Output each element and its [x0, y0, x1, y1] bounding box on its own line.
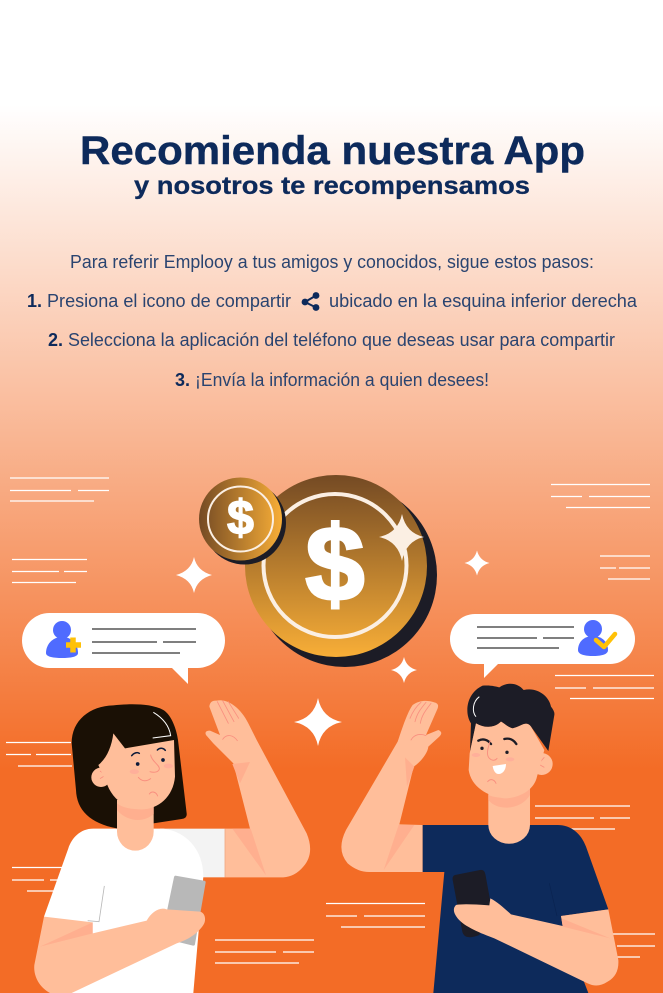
woman shirt — [44, 829, 203, 993]
woman neck — [117, 800, 154, 851]
step 1 — [27, 291, 638, 311]
step 2: Selecciona la aplicación del teléfono que deseas usar para compartir — [68, 330, 615, 350]
bubble text lines — [477, 627, 574, 648]
man hair — [467, 684, 554, 752]
woman hair highlight — [153, 712, 171, 738]
woman phone — [163, 877, 204, 944]
man shirt — [423, 825, 608, 993]
man phone — [453, 870, 491, 937]
man hair highlight — [473, 697, 479, 717]
man ear — [531, 753, 553, 775]
small coin — [199, 478, 286, 564]
woman sleeve — [160, 829, 225, 877]
icon: verified user — [578, 620, 615, 656]
icon: share — [302, 292, 319, 311]
man raised arm — [341, 701, 441, 872]
woman — [34, 700, 310, 993]
man face — [469, 722, 544, 798]
big coin: $ — [306, 505, 364, 623]
subtitle: y nosotros te recompensamos — [134, 172, 530, 200]
intro text: Para referir Emplooy a tus amigos y conocidos, sigue estos pasos: — [70, 252, 594, 272]
title: Recomienda nuestra App — [80, 129, 585, 173]
step 2: 2. — [48, 330, 63, 350]
icon: add user — [46, 621, 81, 658]
man — [341, 684, 618, 993]
woman hair — [72, 704, 187, 828]
woman lower arm — [34, 909, 205, 993]
step 3: ¡Envía la información a quien desees! — [195, 370, 489, 390]
woman ear — [91, 768, 111, 787]
step 3: 3. — [175, 370, 190, 390]
step 1: Presiona el icono de compartir — [47, 291, 291, 311]
woman sleeve seam — [88, 886, 104, 922]
woman face — [98, 733, 175, 809]
sparkles — [176, 514, 490, 746]
man neck — [488, 780, 530, 844]
man lower arm — [454, 898, 618, 985]
small coin: $ — [227, 492, 254, 545]
step 1: ubicado en la esquina inferior derecha — [329, 291, 638, 311]
speech bubble right — [450, 614, 635, 678]
bubble text lines — [92, 629, 196, 653]
speech bubble left — [22, 613, 225, 684]
woman raised arm — [205, 700, 310, 877]
speed lines — [6, 478, 655, 963]
big coin — [245, 475, 437, 667]
step 1: 1. — [27, 291, 42, 311]
